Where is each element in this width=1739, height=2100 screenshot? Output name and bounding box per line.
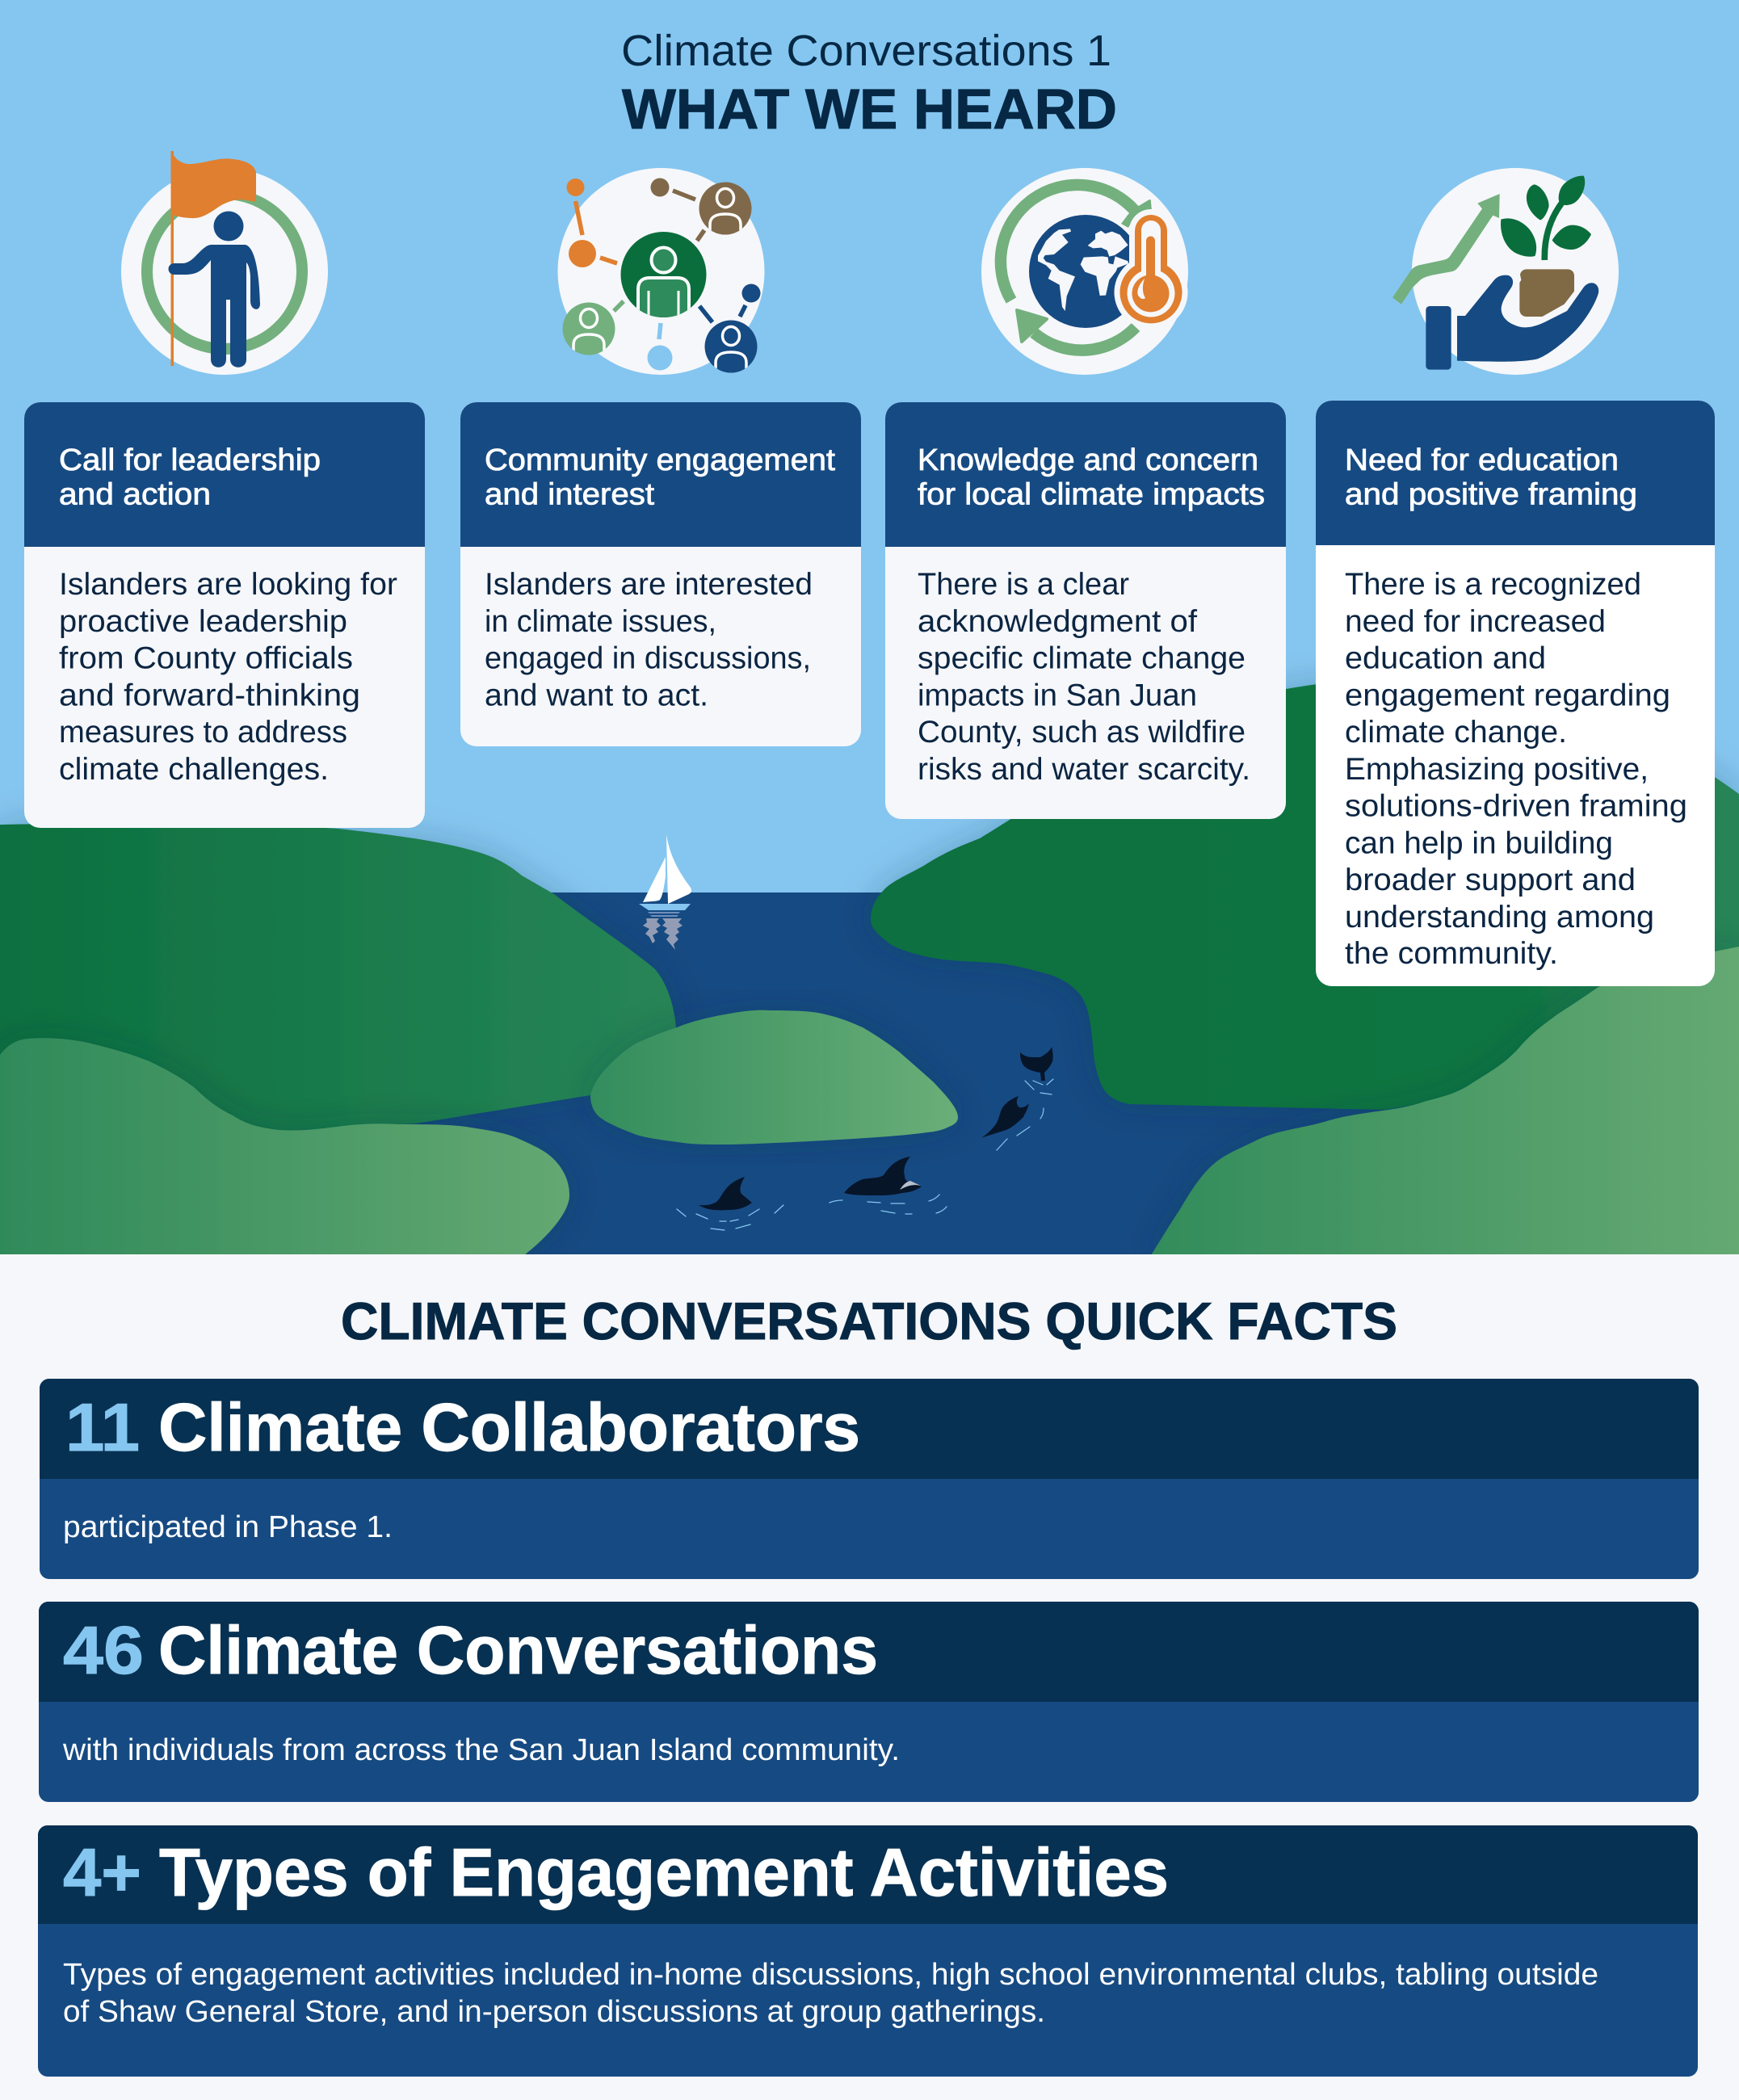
panel: need for education: Need for education <box>1345 443 1619 477</box>
icon: leadership person with flag <box>121 151 328 375</box>
panel: call for leadership: and action <box>59 477 211 511</box>
whale tail upper <box>1020 1047 1053 1094</box>
panel: knowledge and concern <box>885 402 1286 819</box>
whale fin left <box>677 1177 783 1230</box>
panel: 4+ types of engagement activities: Types of engagement activities included in-home discussions, high school environmental clubs, tabling outside <box>63 1958 1598 1992</box>
panel: 11 climate collaborators <box>40 1379 1699 1579</box>
panel: knowledge and concern: specific climate change <box>918 641 1245 675</box>
panel: 4+ types of engagement activities: 4+ <box>63 1834 141 1910</box>
panel header <box>1316 401 1715 545</box>
panel: call for leadership: measures to address <box>59 715 347 750</box>
panel: call for leadership <box>24 402 425 828</box>
panel: 46 climate conversations: 46 <box>63 1612 144 1688</box>
sky background <box>0 0 1739 1254</box>
panel: community engagement <box>460 402 861 746</box>
row header <box>39 1602 1699 1702</box>
row header <box>38 1825 1698 1924</box>
boat reflection <box>643 912 683 950</box>
panel: knowledge and concern: for local climate impacts <box>918 477 1265 511</box>
title <box>621 27 1117 141</box>
panel: knowledge and concern: impacts in San Juan <box>918 678 1197 712</box>
panel: knowledge and concern: acknowledgment of <box>918 604 1197 639</box>
panel: 46 climate conversations: Climate Conversations <box>158 1612 878 1688</box>
orca dorsal fin <box>830 1157 947 1214</box>
panel: community engagement: Islanders are interested <box>485 567 813 602</box>
landscape illustration <box>0 677 1739 1255</box>
panel: knowledge and concern: Knowledge and concern <box>918 443 1258 477</box>
panel: community engagement: and want to act. <box>485 678 708 712</box>
panel: 4+ types of engagement activities: Types of Engagement Activities <box>159 1834 1169 1910</box>
panel: 4+ types of engagement activities: of Shaw General Store, and in-person discussions at group gatherings. <box>63 1995 1045 2029</box>
panel header <box>24 402 425 547</box>
panel: need for education: broader support and <box>1345 863 1636 897</box>
panel: need for education: the community. <box>1345 936 1558 971</box>
panel: 11 climate collaborators: Climate Collaborators <box>158 1389 860 1465</box>
panel: need for education: and positive framing <box>1345 477 1637 511</box>
panel: community engagement: Community engagement <box>485 443 835 477</box>
icon: hand, plant and growth arrow <box>1392 168 1619 375</box>
island: dark left <box>0 824 676 1147</box>
panel: need for education: solutions-driven framing <box>1345 788 1687 824</box>
panel: call for leadership: from County officials <box>59 641 353 675</box>
panel: need for education: need for increased <box>1345 604 1606 639</box>
sailboat <box>639 834 691 950</box>
page background, lower section <box>0 1254 1739 2100</box>
panel: 46 climate conversations <box>39 1602 1699 1802</box>
island: small centre <box>590 1010 958 1144</box>
panel: call for leadership: proactive leadership <box>59 604 347 639</box>
panel: call for leadership: Islanders are looking for <box>59 567 397 602</box>
panel: community engagement: engaged in discussions, <box>485 641 811 675</box>
sea <box>296 892 1415 1254</box>
icon: globe, thermometer and cycle arrows <box>981 168 1188 375</box>
panel: knowledge and concern: risks and water scarcity. <box>918 752 1250 787</box>
panel: 4+ types of engagement activities <box>38 1825 1698 2077</box>
panel header <box>885 402 1286 547</box>
panel: call for leadership: Call for leadership <box>59 443 321 477</box>
panel: need for education: engagement regarding <box>1345 678 1670 712</box>
panel: need for education: There is a recognized <box>1345 567 1641 602</box>
panel header <box>460 402 861 547</box>
panel: need for education: climate change. <box>1345 715 1567 750</box>
icon: community network <box>557 168 764 376</box>
panel: need for education: Emphasizing positive, <box>1345 752 1649 787</box>
island: front left <box>0 1038 569 1255</box>
panel: call for leadership: climate challenges. <box>59 752 329 787</box>
island: front right <box>1151 947 1739 1255</box>
panel: 11 climate collaborators: participated in Phase 1. <box>63 1510 393 1544</box>
panel: need for education: education and <box>1345 641 1546 675</box>
title: Climate Conversations 1 <box>621 27 1111 75</box>
panel: need for education: can help in building <box>1345 825 1613 860</box>
panel: community engagement: in climate issues, <box>485 604 716 639</box>
title: what we heard: WHAT WE HEARD <box>622 78 1117 141</box>
panel: knowledge and concern: There is a clear <box>918 567 1129 602</box>
panel: 11 climate collaborators: 11 <box>65 1389 140 1465</box>
panel: call for leadership: and forward-thinking <box>59 678 360 712</box>
whale fin diving <box>981 1096 1044 1150</box>
orca saddle patch <box>900 1181 921 1190</box>
panel: knowledge and concern: County, such as wildfire <box>918 715 1245 750</box>
row header <box>40 1379 1699 1479</box>
island: dark right <box>871 677 1739 1110</box>
panel: community engagement: and interest <box>485 477 654 511</box>
heading: quick facts: CLIMATE CONVERSATIONS QUICK FACTS <box>341 1292 1397 1350</box>
panel: 46 climate conversations: with individuals from across the San Juan Island community. <box>62 1733 900 1767</box>
panel: need for education <box>1316 401 1715 986</box>
panel: need for education: understanding among <box>1345 900 1654 934</box>
